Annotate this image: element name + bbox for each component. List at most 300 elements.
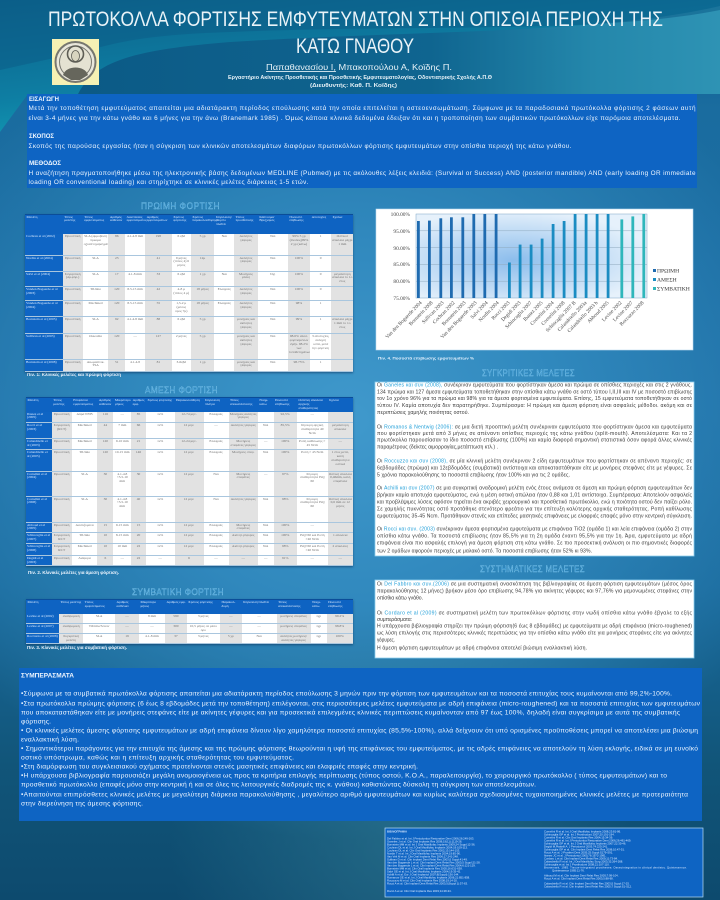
text block: method: Η αναζήτηση πραγματοποιήθηκε μέσω της ηλεκτρονικής βάσης δεδομένων MEDLINE (Pubmed) με τις ακόλουθες λέξεις κλειδιά: (Survival or Success) AND (posterior mandible) AND (early loading OR immediate	[28, 169, 696, 177]
table: immediate loading studies: Αριθμός εμφ.	[133, 398, 145, 406]
table: early loading studies: Όχι	[270, 272, 275, 276]
table: immediate loading studies: Συγκριτική RCT	[54, 544, 70, 552]
table: immediate loading studies: 12 h	[157, 544, 163, 548]
text block: conclusions: •Η υπάρχουσα βιβλιογραφία παρουσιάζει μεγάλη ανομοιογένεια ως προς τα κριτήρια επιλογής περίπτωσης (τύπος οστού, Κ.Ο.Α., παραλειτουργία), το χειρουργικό πρωτόκολλο ( τύπος εμφυτευμάτων) και το	[21, 771, 667, 779]
table: early loading studies: 41	[157, 256, 160, 260]
table: conventional loading studies: Levine et al (2002)	[27, 614, 54, 618]
legend: ΠΡΩΙΜΗ	[657, 268, 679, 274]
text block: references right column: Schincaglia GP et al. Clin Implant Dent Relat Res 2008;10:47-51.	[544, 848, 625, 852]
table: immediate loading studies: 1 απώλεια	[333, 533, 348, 537]
table: immediate loading studies: 10-15 mm	[115, 450, 130, 454]
x axis labels: Nordin 2004	[478, 300, 501, 323]
table: immediate loading studies: Ανοδιζόμενα	[76, 522, 94, 526]
x axis labels: Cornelini 2004	[529, 300, 556, 327]
panel: systematic reviews: Οι Cordaro et al (2009) σε συστηματική μελέτη των πρωτοκόλλων φόρτισης στην νωδή οπίσθια κάτω γνάθο έβγαλε τα εξής	[377, 610, 693, 617]
table: immediate loading studies: 12 μην.	[184, 544, 194, 548]
text block: introduction: Μετά την τοποθέτηση εμφυτεύματος απαιτείται μια αδιατάρακτη περίοδος επούλωσης κατά την οποία επιτελείται η οστεοενσωμάτωση. Σύμφωνα με τα παραδοσιακά πρωτόκολλα φόρτισης 2 φάσεων αυτή	[28, 104, 696, 112]
bars: immediate loading	[508, 214, 610, 298]
table: early loading studies: Προοπτική	[65, 301, 80, 305]
table: immediate loading studies: Οστέινη απώλεια αρχικής σταθερότητας	[298, 398, 323, 410]
table: immediate loading studies: Παρακολούθηση	[176, 398, 200, 402]
table: immediate loading studies: Ακίνητ.γέφυρες	[232, 533, 254, 537]
table: immediate loading studies: 12-74 μην.	[181, 412, 197, 416]
top-left teal corner	[0, 0, 720, 132]
x axis labels: Rocci 2003	[491, 300, 512, 321]
table: early loading studies: Σχόλια	[333, 214, 342, 218]
x axis labels: Levine 2007	[612, 300, 635, 323]
table: conventional loading studies: Roccuzzo et al (2008)	[27, 634, 58, 638]
table: conventional loading studies: 300	[173, 624, 178, 628]
text block: references right column: Branemark, 1985. Tissue-integrated prostheses: Osseointegration in clinical dentistry. Quintessence.	[544, 866, 687, 870]
table: early loading studies: 2 μήνες	[176, 334, 187, 338]
table: immediate loading studies: Ναι	[263, 522, 268, 526]
caption: table 1: Πιν. 1: Κλινικές μελέτες και πρώιμη φόρτιση	[27, 372, 121, 377]
text block: references right column: Rocci A et al. Clin Implant Dent Relat Res 2003;5:88-98.	[544, 876, 614, 880]
table: conventional loading studies: Levine et al (2007)	[27, 624, 54, 628]
bars: early loading	[417, 214, 498, 298]
text block: introduction	[28, 104, 696, 122]
table: immediate loading studies: Machined	[78, 544, 92, 548]
table: conventional loading studies: αναδρομική	[63, 614, 80, 618]
table: early loading studies: 3 αποτυχίες, σκληρή οστά, μετά την φόρτιση	[312, 334, 329, 350]
table: immediate loading studies: Ναι	[263, 544, 268, 548]
table: conventional loading studies: 10,5 μήνες σε μέσο όρο	[190, 624, 217, 632]
table: early loading studies: Προοπτική	[65, 287, 80, 291]
table: early loading studies: 99%	[296, 317, 302, 321]
table: conventional loading studies: 98.8%	[335, 624, 344, 628]
table: early loading studies: 18 μήνες	[196, 287, 209, 291]
table: immediate loading studies: Σίγουρη σταθερότητα ISQ 60	[300, 496, 325, 508]
text block: references left column: Bornstein MM et al. Int J Oral Maxillofac Implants 2009;24 Suppl:12-36.	[387, 842, 476, 846]
heading: introduction: ΕΙΣΑΓΩΓΗ	[29, 96, 59, 103]
table: early loading studies: Συγκριτική (άμ.φόρ.)	[65, 272, 81, 279]
text block: references right column: Calandriello R et al. Int J Oral Maxillofac Surg 2003;32:264-268.	[544, 860, 623, 864]
table: immediate loading studies: —	[264, 472, 267, 476]
table: early loading studies: 86	[115, 234, 118, 238]
table: immediate loading studies: Σύγκλειση πλάγια	[205, 398, 220, 406]
table: immediate loading studies: 85,5%	[281, 423, 290, 427]
table: conventional loading studies	[26, 599, 353, 644]
table: immediate loading studies: Μονήρεις στεφάνες	[236, 522, 250, 530]
table: conventional loading studies: 1χρ	[316, 624, 321, 628]
chart panel: implant survival percentage	[376, 209, 693, 350]
table: immediate loading studies: Ελαφριές	[209, 439, 223, 443]
table: early loading studies: μονήρεις και ακίνητες γέφυρες	[237, 334, 255, 346]
table: immediate loading studies: TiUnite	[79, 533, 90, 537]
table: immediate loading studies: 10	[104, 544, 107, 548]
panel: comparative studies: Οι Roccuzzo και συν (2008), σε μία κλινική μελέτη συνέκριναν 2 είδη εμφυτευμάτων που φορτίστηκαν σε απέναντι περιοχές: σε	[377, 458, 693, 465]
text block: conclusions: •Απαιτούνται επιπρόσθετες κλινικές μελέτες με μεγαλύτερη διάρκεια παρακολούθησης , μεγαλύτερο αριθμό εμφυτευμάτων και κυρίως καλύτερα σχεδιασμένες τυχαιοποιημένες κλινικές μελέτες με προτεραιότητα	[21, 790, 688, 798]
heading: method: ΜΕΘΟΔΟΣ	[29, 160, 61, 167]
authors and affiliation: (Διευθυντής: Καθ. Π. Κοϊδης)	[310, 83, 397, 89]
text block: references left column: Roccuzzo M et al. Clin Oral Implants Res 2008;19:14-20.	[387, 878, 458, 882]
table: immediate loading studies: Cornelini et al (2004)	[27, 472, 47, 479]
table: conventional loading studies: 5 χρ	[228, 634, 234, 638]
caption: table 2: Πιν. 2. Κλινικές μελέτες για άμεση φόρτιση.	[28, 570, 119, 575]
table: conventional loading studies: —	[150, 624, 154, 628]
text block: references left column: Van den Bogaerde L et al. Clin Implant Dent Relat Res 2004;6:121-129.	[387, 864, 476, 868]
table: immediate loading studies: 66	[137, 423, 140, 427]
text block: references right column: Cornelini R et al. Clin Oral Implants Res 2004;15:34-39.	[544, 836, 613, 840]
y axis labels: 100.00%	[391, 212, 410, 218]
table: early loading studies: Machined	[89, 301, 103, 305]
panel: comparative studies: παραμέτρους (δείκτες αιμορραγίας,μετάπτωση κτλ.) .	[377, 444, 498, 451]
table: early loading studies: 4.1-4.8 mm	[127, 317, 143, 321]
panel: comparative studies: 134 πρώιμα και 127 άμεσα εμφυτεύματα τοποθετήθηκαν στην οπίσθια κάτω γνάθο σε οστό τύπου I,II,III και IV με ποσοστό επιβίωσης	[377, 388, 693, 395]
table: immediate loading studies: 22	[137, 556, 140, 560]
table: immediate loading studies: Ναι	[213, 472, 219, 476]
table: immediate loading studies: Ροπή καθίλωσης > 45 Ncm	[299, 439, 325, 447]
text block: conclusions: φόρτισης.	[21, 717, 51, 725]
panel: comparative studies: 6εβδομάδες (πρώιμα) και 12εβδομάδες (συμβατικά) αντίστοιχα και αποκαταστάθηκαν είτε με μονήρεις στεφάνες είτε με γέφυρες. Σε	[377, 465, 693, 472]
table: early loading studies: 8.5-15 mm	[127, 301, 143, 305]
table: immediate loading studies: TiUnite	[79, 450, 90, 454]
table: immediate loading studies: Ελαφριές	[209, 412, 223, 416]
table: early loading studies: 5 χρ	[200, 234, 206, 238]
heading: conclusions: ΣΥΜΠΕΡΑΣΜΑΤΑ	[21, 672, 74, 679]
x axis labels: Van den Bogaerde 2003	[440, 300, 479, 340]
table: immediate loading studies: Calandriello et al (2005)	[27, 450, 48, 458]
table: immediate loading studies: 10 mm	[117, 544, 127, 548]
table: conventional loading studies: Παρακολ. δομή	[221, 600, 235, 608]
x axis labels: Abboud 2005	[586, 300, 611, 325]
table: immediate loading studies: 2 απώλειες	[333, 544, 348, 548]
table: immediate loading studies: —	[264, 556, 267, 560]
table: immediate loading studies: 12 μην.	[184, 450, 194, 454]
panel: systematic reviews	[375, 580, 694, 658]
table: immediate loading studies: Σίγουρη σταθερότητα ISQ 60	[300, 472, 325, 483]
text block: references left column: Romanos GE et al. Int J Oral Maxillofac Implants 2006;21:851-858.	[387, 876, 470, 880]
table: conventional loading studies: μονήρεις στεφάνες	[280, 624, 307, 628]
table: conventional loading studies: 19	[125, 634, 129, 638]
table: early loading studies: 88	[157, 317, 160, 321]
table: early loading studies: μονήρεις και ακίνητες γέφυρες	[237, 317, 255, 329]
table: early loading studies: 100%	[295, 272, 303, 276]
text block: references left column: Achilli A et al. Eur J Oral Implantol 2007;8(Suppl):136-144.	[387, 872, 459, 876]
table: conventional loading studies: 1χρ	[316, 614, 321, 618]
text block: references right column: Cordaro L et al. Clin Implant Dent Relat Res 2009;11:73-84.	[544, 856, 618, 860]
heading: systematic reviews: ΣΥΣΤΗΜΑΤΙΚΕΣ ΜΕΛΕΤΕΣ	[480, 564, 585, 575]
table: conventional loading studies: SLA	[96, 614, 102, 618]
table: conventional loading studies: 3 μήνες	[198, 614, 209, 618]
table: conventional loading studies: Τύπος εμφυτεύματος	[85, 600, 105, 608]
table: immediate loading studies: Χρόνος φόρτισης	[147, 398, 172, 402]
table: immediate loading studies: Schincaglia et al (2008)	[27, 544, 50, 552]
table: conventional loading studies: 3 μήνες	[198, 634, 209, 638]
table: immediate loading studies: 91%	[282, 556, 288, 560]
table: early loading studies: Ναι	[270, 317, 275, 321]
panel: systematic reviews: οπίσθια κάτω γνάθο.	[377, 594, 423, 601]
table: early loading studies: 1,5-2 μ (μέσος όρος 7μ)	[175, 301, 187, 313]
text block: references right column: Rocci A et al. J Prosthet Dent 2005;25:Suppl:S179-S91.	[544, 850, 613, 854]
table: early loading studies: Αποτυχίες	[312, 214, 326, 218]
x axis labels: Ibanez 2005	[522, 300, 545, 323]
text block: aim: Σκοπός της παρούσας εργασίας ήταν η σύγκριση των κλινικών αποτελεσμάτων διαφόρων πρωτοκόλλων φόρτισης εμφυτευμάτων στην οπίσθια περιοχή της κάτω γνάθου.	[28, 142, 572, 150]
table: immediate loading studies: Ναι	[263, 423, 268, 427]
table: early loading studies: 5 χρ	[200, 317, 206, 321]
table: immediate loading studies: Αριθμός ασθενών	[99, 398, 111, 406]
table: immediate loading studies: Ελαφριές	[209, 450, 223, 454]
text block: conclusions: που αποκαταστάθηκαν είτε με μονήρεις στεφάνες είτε με ακίνητες γέφυρες και για προσεκτικά επιλεγμένες κλινικές περιπτώσεις κυμαίνονταν από 97 έως 100%, δηλαδή είναι συγκρίσιμα με αυτά της συμβατικής	[21, 708, 681, 716]
table: immediate loading studies: —	[121, 556, 124, 560]
table: immediate loading studies: 1 έτος μετά, καλή σταθερότητα οστικά	[331, 450, 349, 466]
y axis labels: 90.00%	[393, 246, 411, 252]
table: early loading studies: 3-6εβδ	[176, 360, 186, 364]
table: immediate loading studies: 92,5%	[281, 412, 290, 416]
table: conventional loading studies: —	[229, 614, 233, 618]
table: immediate loading studies: Αδρά NYB	[77, 412, 93, 416]
y axis labels: 85.00%	[393, 262, 411, 268]
legend: ΑΜΕΣΗ	[657, 278, 677, 284]
x axis labels: Schincaglia 2007	[504, 300, 534, 330]
table: immediate loading studies: 9-15 mm	[116, 522, 129, 526]
title	[48, 8, 663, 58]
table: immediate loading studies: —	[241, 556, 245, 560]
table: conventional loading studies: 99.2%	[335, 614, 344, 618]
table: early loading studies: Ακίνητες γέφυρες	[240, 287, 252, 295]
table: conventional loading studies: 4.1-8 mm	[145, 634, 159, 638]
table: immediate loading studies: Προοπτική	[54, 472, 69, 476]
text block: references left column: Del Fabbro et al. Int J Periodontics Restorative Dent 2006;26:249-263.	[387, 836, 474, 840]
table: immediate loading studies: 12 h	[157, 423, 163, 427]
text block: conclusions: •Σύμφωνα με τα συμβατικά πρωτόκολλα φόρτισης απαιτείται μια αδιατάρακτη περίοδος επούλωσης 3 μηνών πριν την φόρτιση των εμφυτευμάτων και τα ποσοστά επιτυχίας τους κυμαίνονται από 99,2%-100%.	[21, 689, 672, 697]
table: immediate loading studies: Μονήρεις στεφάνες	[236, 472, 250, 479]
table: immediate loading studies: 97%	[282, 472, 288, 476]
text block: conclusions	[21, 689, 701, 807]
table: immediate loading studies: SLA	[81, 496, 88, 500]
table: early loading studies: Nordin et al (2004)	[26, 256, 53, 260]
table: immediate loading studies: Σχόλια	[329, 398, 339, 402]
text block: references left column: Cochran DL et al. Int J Oral Maxillofac Implants 2004;19:109-113.	[387, 846, 468, 850]
table: early loading studies: 0	[320, 272, 321, 276]
panel: comparative studies: επιφάνεια είναι πιο ασφαλής επιλογή για άμεση φόρτιση στη κάτω γνάθο. Σε πιο προσεκτική ανάλυση οι πιο σημαντικές διαφορές	[377, 540, 693, 547]
table: conventional loading studies: —	[257, 614, 261, 618]
text block: references left column: Cochran DL et al. Clin Oral Implants Res 2002;13:144-153.	[387, 848, 460, 852]
panel: comparative studies: περιπτώσεις χαμηλής ποιότητας οστού.	[377, 409, 469, 416]
text block: references right column: Abboud M et al. Clin Implant Dent Relat Res 2005;7:99-104.	[544, 874, 619, 878]
table: immediate loading studies: SLA	[81, 472, 88, 476]
table: immediate loading studies: Cornelini et al (2008)	[27, 496, 47, 504]
x axis labels: Levine 2002	[601, 300, 624, 323]
table: immediate loading studies: Ναι	[213, 496, 219, 500]
text block: references right column: Ibanez JC et al. J Periodontol 2005;76:1972-1981.	[544, 854, 607, 858]
table: immediate loading studies: Machined	[78, 423, 92, 427]
table: conventional loading studies: 37	[174, 634, 178, 638]
table: conventional loading studies: Μελέτη	[28, 600, 38, 604]
heading: references: ΒΙΒΛΙΟΓΡΑΦΙΑ	[387, 830, 407, 834]
table: early loading studies: Ναι	[222, 234, 227, 238]
x axis labels: Bornstein 2008	[408, 300, 435, 327]
table: immediate loading studies: —	[121, 412, 124, 416]
table: early loading studies: Ακίνητες γέφυρες	[240, 234, 252, 242]
table: immediate loading studies: ISQ>60 και Ροπή >40 Ncm	[300, 533, 325, 541]
text block: references left column: Ganeles J et al. Clin Oral Implants Res 2008;19(11):1119-28.	[387, 840, 462, 844]
table: conventional loading studies: —	[125, 624, 129, 628]
table: immediate loading studies: Ναι	[263, 496, 268, 500]
table: early loading studies: Διαστάσεις εμφυτεύματος	[127, 214, 147, 222]
table: immediate loading studies: Abboud et al (2005)	[27, 522, 45, 530]
panel: comparative studies: 5 χρόνια παρακολούθησης τα ποσοστά επιβίωσης ήταν 100% και για τις 2 ομάδες.	[377, 472, 570, 479]
text block: references left column: Rocci A et al. Clin Implant Dent Relat Res 2003;5(Suppl 1):57-63.	[387, 882, 468, 886]
table: early loading studies: 120	[114, 287, 119, 291]
table: immediate loading studies: —	[214, 556, 218, 560]
table: conventional loading studies: Συγκριτική μελέτη	[63, 634, 79, 642]
table: immediate loading studies: Rocci et al (2003)	[27, 423, 42, 431]
text block: references right column: Degidi M,Piattelli A. J Periodontol 2003;74:225-241.	[544, 844, 608, 848]
panel: comparative studies: Οι Ganeles και συν (2008), συνέκριναν εμφυτεύματα που φορτίστηκαν άμεσα και πρώιμα σε οπίσθιες περιοχές και στις 2 γνάθους.	[377, 381, 692, 388]
panel: comparative studies: Οι Rocci και συν. (2003) συνέκριναν άμεσα φορτισμένα εμφυτεύματα με επιφάνεια TiO2 (ομάδα 1) και λεία επιφάνεια (ομάδα 2) στην	[377, 526, 692, 533]
table: early loading studies: SLA	[92, 256, 99, 260]
text block: introduction: είναι 3-4 μήνες για την κάτω γνάθο και 6 μήνες για την άνω (Branemark 1985) . Όμως κάποια κλινικά δεδομένα έδειξαν ότι και η τροποποίηση των συμβατικών πρωτόκολλων είχε παρόμοια αποτελέσματα.	[28, 114, 681, 122]
table: early loading studies: Ναι	[270, 334, 275, 338]
table: immediate loading studies: Οστική απώλεια 0,6 mm σε 12 μήνες	[329, 496, 352, 508]
x axis labels: Calandriello 2003a	[557, 300, 589, 333]
bars: conventional loading	[620, 214, 645, 298]
table: immediate loading studies: Ακίνητες γέφυρες	[231, 496, 256, 500]
table: immediate loading studies: 12 μην.	[184, 522, 194, 526]
table: immediate loading studies: Degidi et al (2003)	[27, 556, 43, 564]
table: immediate loading studies: Ροπή > 45 Ncm	[301, 450, 323, 454]
table: early loading studies: Προοπτική	[65, 317, 80, 321]
table: immediate loading studies: 116	[103, 412, 108, 416]
panel: comparative studies: βρήκαν καμία αποτυχία εμφυτεύματος, ενώ η μέση οστική απώλεια ήταν 0,88 και 1,01 αντίστοιχα. Συμπέρασμα: Αποτελούν ασφαλείς	[377, 492, 693, 499]
table: immediate loading studies: Συγκριτική RCT	[54, 533, 70, 541]
table: immediate loading studies: 12 μην.	[184, 496, 194, 500]
authors and affiliation: Παπαθανασίου Ι, Μπακοπούλου Α, Κοϊδης Π.	[266, 62, 452, 72]
table: early loading studies: Cochran et al (2002)	[26, 234, 55, 238]
table: early loading studies: 4.1-4.8	[130, 360, 140, 364]
x axis labels: Van den Bogaerde 2004	[385, 300, 424, 340]
table: immediate loading studies: 12-24 μην.	[181, 439, 197, 443]
table: immediate loading studies: 22	[137, 544, 140, 548]
table: immediate loading studies: Προοπτική	[54, 522, 69, 526]
caption: table 3: Πιν. 3. Κλινικές μελέτες για συμβατική φόρτιση.	[27, 645, 127, 650]
text block: references right column: Schincaglia GP et al. Int J Oral Maxillofac Implants 2007;22:35-46.	[544, 842, 626, 846]
table: early loading studies: 8.5-15 mm	[127, 287, 143, 291]
table: early loading studies: 4.1-4.8 mm	[127, 234, 143, 238]
table: immediate loading studies: 15	[104, 522, 107, 526]
table: immediate loading studies: Τύπος μελέτης	[53, 398, 64, 406]
table: immediate loading studies: —	[310, 412, 314, 416]
table: conventional loading studies: 8 mm	[148, 614, 156, 618]
table: immediate loading studies: —	[264, 439, 267, 443]
table: immediate loading studies: 4.1-4.8 ×5.5-10 mm	[117, 472, 128, 483]
table: immediate loading studies: —	[310, 556, 314, 560]
table: immediate loading studies: 120	[103, 450, 108, 454]
table: early loading studies: 42	[157, 287, 160, 291]
table: early loading studies: SLA	[92, 317, 99, 321]
heading: early loading: ΠΡΩΙΜΗ ΦΟΡΤΙΣΗ	[141, 201, 220, 212]
x axis labels: Salvi 2004	[470, 300, 490, 320]
table: early loading studies: Μελέτη	[26, 214, 38, 218]
table: immediate loading studies: Ακίνητ.γέφυρες	[232, 544, 254, 548]
table: early loading studies: 5 χρ	[200, 334, 206, 338]
table: early loading studies	[25, 214, 353, 372]
table: early loading studies: μεγαλύτερη απώλεια το 1ο έτος	[332, 272, 352, 283]
panel: comparative studies: Οι Achilli και συν (2007) σε μια συγκριτική αναδρομική μελέτη ενός έτους ανάμεσα σε άμεση και πρώιμη φόρτιση εμφυτευμάτων δεν	[377, 485, 692, 492]
legend: ΣΥΜΒΑΤΙΚΗ	[657, 286, 690, 292]
table: early loading studies: Ναι	[270, 287, 275, 291]
table: immediate loading studies: 15	[137, 522, 140, 526]
table: immediate loading studies: ISQ>60 και Ροπή >40 Ncm	[300, 544, 325, 552]
table: immediate loading studies: Μελέτη	[28, 398, 38, 402]
table: early loading studies: —	[133, 334, 137, 338]
authors and affiliation: Εργαστήριο Ακίνητης Προσθετικής και Προσθετικής Εμφυτευματολογίας, Οδοντιατρικής Σχολής Α.Π.Θ	[228, 75, 493, 81]
table: early loading studies: Προοπτική	[65, 334, 80, 338]
text block: references right column: Calandriello R et al. Clin Implant Dent Relat Res 2005;7 Suppl:S1-S12.	[544, 884, 632, 888]
table: early loading studies: 4.1-8 mm	[128, 272, 142, 276]
table: early loading studies: 6 εβδ	[177, 272, 185, 276]
table: immediate loading studies: 8-15 mm	[116, 533, 129, 537]
table: immediate loading studies: 100%	[281, 450, 289, 454]
table: early loading studies: 0	[320, 256, 321, 260]
text block: conclusions: προσθετικό πρωτόκολλο (επαφές μόνο στην κεντρική ή και σε όλες τις λειτουργικές διαδρομές της κ. γνάθου) καθιστώντας δύσκολη τη σύγκριση των αποτελεσμάτων.	[21, 780, 536, 788]
table: early loading studies: 120	[114, 334, 119, 338]
x axis labels: Cochran 2002	[432, 300, 457, 325]
table: conventional loading studies: —	[257, 624, 261, 628]
table: immediate loading studies: —	[214, 423, 218, 427]
text block: references right column	[544, 830, 687, 888]
panel: systematic reviews: γέφυρες.	[377, 637, 395, 644]
table: early loading studies: 4-8 μ (τύπος 4 μ)	[173, 287, 189, 295]
panel: comparative studies: εμφυτεύματος 35-45 Ncm. Προτάθηκαν στενές και επίπεδες μασητικές επιφάνειες με ελαφριές επαφές μόνο στην κεντρική σύγκλειση.	[377, 513, 692, 520]
table: conventional loading studies: Αριθμός ασθενών	[116, 600, 129, 608]
table: early loading studies: 1	[320, 360, 321, 364]
table: conventional loading studies: Ποσοστό επιβίωσης	[328, 600, 342, 608]
text block: references right column: Cornelini R et al. Int J Periodontics Restorative Dent 2006;26:461-469.	[544, 838, 631, 842]
panel: comparative studies: τον 1ο χρόνο 96% για τα πρώιμα και 98% για τα άμεσα φορτισμένα εμφυτεύματα. Επίσης, 15 εμφυτεύματα τοποθετήθηκαν σε οστό	[377, 395, 692, 402]
table: early loading studies: Vanden Bogaerde et al (2004)	[26, 301, 58, 309]
text block: references left column: Sullivan D et al. Clin Implant Dent Relat Res 2003;5 Suppl:41-49.	[387, 858, 468, 862]
table: early loading studies: 1	[320, 301, 321, 305]
table: immediate loading studies: 12 h	[157, 496, 163, 500]
text block: references right column: Calandriello R et al. Clin Implant Dent Relat Res 2003;5 Suppl:17-25.	[544, 882, 630, 886]
text block: conclusions: •Στη διαμόρφωση του συγκλεισιακού σχήματος προτείνονται στενές μασητικές επιφάνειες και ελαφριές επαφές στην κεντρική.	[21, 762, 418, 770]
table: conventional loading studies: Νοημ. κάτω	[312, 600, 321, 608]
table: immediate loading studies: Ναι	[263, 450, 268, 454]
table: immediate loading studies: 30	[137, 472, 140, 476]
panel: comparative studies: τύπου IV. Καμία αποτυχία δεν παρατηρήθηκε. Συμπέρασμα: Η πρώιμη και άμεση φόρτιση είναι ασφαλείς μέθοδοι. ακόμη και σε	[377, 402, 693, 409]
table: early loading studies: απώλεια μέχρι 1 mm το 1ο έτος	[332, 317, 352, 329]
table: immediate loading studies: Μονήρεις ακίνητες γέφυρες	[230, 412, 257, 419]
table: early loading studies: Bornstein et al (2008)	[26, 360, 57, 364]
table: conventional loading studies: Τύπος αποκατάστασης	[278, 600, 301, 608]
text block: conclusions: οστικό υπόστρωμα, καθώς και η επίτευξη αρχικής σταθερότητας του εμφυτεύματος.	[21, 753, 294, 761]
y axis labels: 95.00%	[393, 229, 411, 235]
y axis labels: 75.00%	[393, 296, 411, 302]
table: early loading studies: Osseotite	[89, 334, 102, 338]
table: early loading studies: Vanden Bogaerde et al (2003)	[26, 287, 58, 295]
table: immediate loading studies: 21	[137, 439, 140, 443]
table: early loading studies: Salvi et al (2004)	[26, 272, 50, 276]
x axis labels: Sullivan 2003	[421, 300, 446, 325]
table: immediate loading studies: Συγκριτική (RCT)	[54, 423, 70, 431]
table: immediate loading studies: Νοημ. κάτω	[259, 398, 268, 406]
panel: comparative studies: Σε χαμηλής πυκνότητας οστό προτάθηκε στενότερο φρεάτιο για την επίτευξη καλύτερης αρχικής σταθερότητας. Ροπή καθίλωσης	[377, 506, 693, 513]
text block: conclusions: στην διερεύνηση της άμεσης φόρτισης.	[21, 799, 143, 807]
table: early loading studies: 0	[320, 287, 321, 291]
table: immediate loading studies: Σίγουρη αρχική σταθερότητα 40 Ncm	[301, 423, 324, 435]
table: immediate loading studies: —	[339, 439, 342, 443]
table: immediate loading studies: Ελαφριές	[209, 533, 223, 537]
text block: references right column: Cornelini R et al. Int J Oral Maxillofac Implants 2008;23:81-86.	[544, 830, 621, 834]
title: ΚΑΤΩ ΓΝΑΘΟΥ	[296, 35, 414, 58]
table: early loading studies: Χρόνος παρακολούθησης	[192, 214, 217, 222]
table: conventional loading studies: Χρόνος φόρτισης	[188, 600, 213, 604]
table: immediate loading studies: —	[339, 556, 342, 560]
table: immediate loading studies: Machined	[78, 439, 92, 443]
x axis labels: Cornelini 2008	[540, 300, 567, 327]
